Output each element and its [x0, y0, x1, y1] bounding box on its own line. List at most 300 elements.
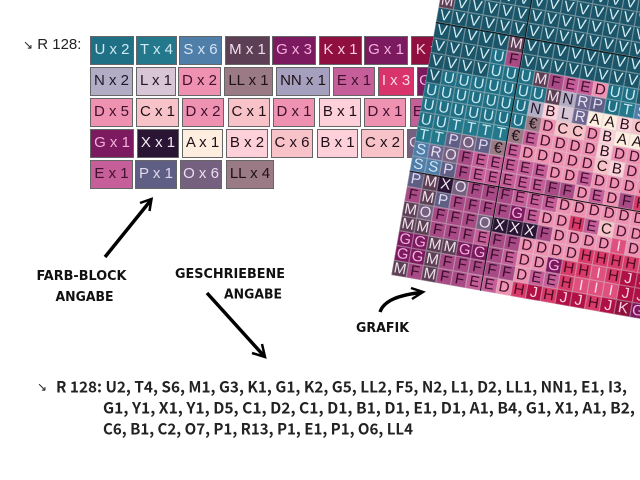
chart: rotated letter grid: C — [555, 120, 569, 139]
chart: rotated letter grid: F — [461, 226, 473, 244]
chart: rotated letter grid: B — [544, 103, 556, 121]
chart: rotated letter grid: S — [414, 141, 427, 159]
chart: rotated letter grid: D — [612, 145, 626, 164]
chart: rotated letter grid: U — [442, 69, 455, 88]
chart: rotated letter grid: G — [410, 248, 424, 266]
chart: rotated letter grid: U — [434, 114, 447, 132]
chart: rotated letter grid: D — [617, 207, 630, 226]
chart: rotated letter grid: M — [533, 70, 548, 89]
chart: rotated letter grid: V — [619, 24, 632, 42]
chart: rotated letter grid: D — [553, 135, 566, 153]
chart: rotated letter grid: V — [515, 5, 527, 24]
colour block row 1 — [90, 36, 455, 65]
chart: rotated letter grid: V — [577, 1, 590, 20]
chart: rotated letter grid: E — [503, 157, 516, 175]
colour block row 4: X x 1 — [141, 134, 175, 151]
chart: rotated letter grid: V — [453, 10, 465, 28]
chart: rotated letter grid: D — [549, 241, 563, 260]
chart: rotated letter grid: V — [495, 33, 507, 51]
chart: rotated letter grid: E — [579, 78, 591, 97]
chart: rotated letter grid: H — [512, 281, 525, 299]
label: geschriebene Angabe — [175, 266, 285, 302]
chart: rotated letter grid: F — [481, 199, 493, 217]
chart: rotated letter grid: V — [427, 67, 440, 85]
chart: rotated letter grid: O — [443, 146, 458, 165]
chart: rotated letter grid: F — [546, 180, 558, 198]
chart: rotated letter grid: U — [496, 109, 510, 128]
chart: rotated letter grid: C — [595, 158, 608, 176]
chart: rotated letter grid: E — [590, 187, 603, 206]
label: Farb-Block Angabe — [36, 268, 127, 305]
chart: rotated letter grid: G — [472, 243, 486, 262]
colour block row 5: LL x 4 — [230, 165, 270, 182]
chart: rotated letter grid: D — [624, 163, 638, 181]
colour block row 2: I x 3 — [382, 72, 410, 89]
chart: rotated letter grid: V — [604, 21, 617, 40]
chart: rotated letter grid: V — [542, 26, 555, 44]
chart: rotated letter grid: V — [482, 15, 495, 34]
arrow: to graphic — [380, 288, 423, 312]
chart: rotated letter grid: U — [511, 112, 524, 131]
colour block row 4: C x 6 — [274, 134, 310, 151]
chart: rotated letter grid: F — [471, 258, 483, 277]
chart: rotated letter grid: D — [572, 199, 586, 218]
chart: rotated letter grid: I — [615, 238, 622, 255]
chart: rotated letter grid: H — [579, 247, 593, 265]
chart: rotated letter grid: J — [558, 289, 568, 307]
chart: rotated letter grid: F — [438, 268, 450, 286]
chart: rotated letter grid: T — [621, 101, 633, 119]
chart: rotated letter grid: U — [492, 47, 505, 66]
chart: rotated letter grid: M — [392, 260, 407, 279]
chart: rotated letter grid: V — [497, 18, 510, 36]
chart: rotated letter grid: D — [520, 144, 534, 163]
chart: rotated letter grid: D — [552, 227, 566, 245]
chart: rotated letter grid: F — [549, 73, 561, 91]
chart: rotated letter grid: O — [477, 213, 492, 232]
chart: rotated letter grid: F — [464, 211, 476, 229]
chart: rotated letter grid: U — [499, 95, 512, 113]
chart: rotated letter grid: D — [548, 165, 561, 183]
chart: rotated letter grid: V — [606, 6, 619, 25]
colour block row 3: C x 1 — [140, 103, 175, 120]
colour block row 1: M x 1 — [229, 41, 266, 58]
chart: rotated letter grid: E — [578, 170, 590, 188]
chart: rotated letter grid: H — [606, 267, 620, 285]
chart: rotated letter grid: F — [561, 182, 573, 200]
chart: rotated letter grid: I — [592, 280, 599, 297]
chart: rotated letter grid: E — [506, 142, 519, 160]
colour block row 2: L x 1 — [140, 72, 172, 89]
chart: rotated letter grid: M — [545, 87, 560, 106]
written instructions: G1, Y1, X1, Y1, D5, C1, D2, C1, D1, B1, D1, E1, D1, A1, B4, G1, X1, A1, B2, — [103, 396, 635, 418]
chart: rotated letter grid: F — [499, 187, 510, 205]
chart: rotated letter grid: F — [506, 234, 517, 252]
chart: rotated letter grid: X — [439, 176, 451, 194]
chart: rotated letter grid: U — [519, 67, 532, 86]
chart: rotated letter grid: F — [459, 149, 471, 167]
chart: rotated letter grid: D — [582, 232, 595, 250]
chart: rotated letter grid: H — [586, 294, 600, 313]
chart: rotated letter grid: V — [569, 46, 582, 64]
chart: rotated letter grid: V — [572, 31, 584, 49]
colour block row 3: D x 1 — [367, 103, 402, 120]
chart: rotated letter grid: V — [613, 54, 626, 72]
chart: rotated letter grid: D — [532, 254, 545, 272]
chart: rotated letter grid: V — [599, 51, 611, 69]
colour block row 4: B x 2 — [230, 134, 264, 151]
chart: rotated letter grid: T — [417, 126, 429, 145]
chart: rotated letter grid: V — [430, 52, 443, 70]
chart: rotated letter grid: U — [457, 72, 470, 90]
chart: rotated letter grid: U — [481, 107, 495, 125]
chart: rotated letter grid: N — [528, 100, 542, 118]
chart: rotated letter grid: E — [543, 194, 555, 213]
chart: rotated letter grid: U — [484, 92, 497, 111]
chart: rotated letter grid: D — [568, 137, 581, 156]
chart: rotated letter grid: U — [419, 111, 433, 130]
chart: rotated letter grid: V — [485, 0, 498, 19]
colour block row 3: C x 1 — [231, 103, 266, 120]
chart: rotated letter grid: V — [512, 20, 525, 39]
chart: rotated letter grid: M — [423, 173, 438, 192]
chart: rotated letter grid: V — [447, 40, 460, 58]
chart: rotated letter grid: U — [451, 102, 465, 120]
colour block row 3: D x 5 — [94, 103, 129, 120]
colour block row 4: O x 7 — [409, 134, 445, 151]
chart: rotated letter grid: D — [626, 240, 640, 258]
colour block row 5: O x 6 — [183, 165, 219, 182]
chart: rotated letter grid: D — [564, 244, 578, 263]
chart: rotated letter grid: U — [454, 87, 468, 105]
chart: rotated letter grid: M — [508, 35, 523, 54]
colour block row 4: A x 1 — [186, 134, 219, 151]
chart: rotated letter grid: D — [567, 229, 580, 248]
chart: rotated letter grid: E — [523, 130, 536, 148]
chart: rotated letter grid: J — [573, 292, 583, 310]
chart: rotated letter grid: V — [537, 55, 549, 74]
chart: rotated letter grid: V — [554, 43, 567, 62]
chart: rotated letter grid: D — [604, 190, 618, 208]
chart: rotated letter grid: I — [595, 265, 602, 282]
chart: rotated letter grid: F — [431, 221, 443, 239]
chart: rotated letter grid: V — [551, 58, 564, 76]
chart: rotated letter grid: D — [585, 125, 599, 144]
chart: rotated letter grid: U — [489, 62, 503, 81]
chart: rotated letter grid: V — [586, 33, 599, 52]
chart: rotated letter grid: X — [493, 216, 506, 235]
chart: rotated letter grid: J — [603, 297, 613, 315]
chart: rotated letter grid: U — [424, 81, 438, 100]
chart: rotated letter grid: M — [424, 250, 440, 269]
chart: rotated letter grid: D — [607, 175, 621, 194]
chart: rotated letter grid: F — [451, 194, 463, 212]
panel: colour block instructions — [90, 36, 457, 189]
chart: rotated letter grid: R — [429, 144, 442, 162]
chart: rotated letter grid: D — [602, 205, 615, 223]
chart: rotated letter grid: E — [564, 75, 576, 94]
chart: rotated letter grid: G — [398, 230, 412, 249]
chart: rotated letter grid: R — [575, 93, 589, 111]
chart: rotated letter grid: A — [588, 110, 601, 129]
chart: rotated letter grid: U — [469, 89, 482, 108]
colour block row 1: G x 1 — [368, 41, 404, 58]
chart: rotated letter grid: A — [615, 130, 628, 149]
chart: rotated letter grid: V — [592, 4, 604, 22]
chart: rotated letter grid: S — [412, 156, 424, 174]
chart: rotated letter grid: E — [474, 151, 486, 170]
written instructions — [37, 376, 635, 440]
colour block row 2: D x 2 — [182, 72, 217, 89]
chart: rotated letter grid: D — [565, 152, 579, 171]
chart: rotated letter grid: M — [442, 238, 457, 257]
colour block row 1: K x 2 — [416, 41, 450, 58]
chart: rotated letter grid: X — [508, 219, 521, 237]
chart: rotated letter grid: H — [576, 262, 590, 280]
colour block row 3: D x 2 — [185, 103, 220, 120]
chart: rotated letter grid: T — [494, 124, 506, 143]
colour block row 1: U x 2 — [94, 41, 130, 58]
chart: rotated letter grid: F — [449, 208, 461, 227]
chart: rotated letter grid: V — [544, 11, 557, 29]
chart: rotated letter grid: D — [557, 197, 571, 215]
chart: rotated letter grid: D — [580, 155, 594, 174]
chart: rotated letter grid: U — [516, 82, 530, 101]
chart: rotated letter grid: V — [462, 42, 475, 61]
colour block row 2: NN x 1 — [280, 72, 326, 89]
chart: rotated letter grid: U — [513, 97, 527, 116]
chart: rotated letter grid: E — [533, 162, 546, 180]
chart: rotated letter grid: D — [575, 185, 588, 203]
chart: rotated letter grid: B — [610, 160, 623, 179]
chart: rotated letter grid: E — [482, 276, 495, 294]
chart: rotated letter grid: M — [402, 200, 418, 219]
chart: rotated letter grid: P — [591, 96, 604, 114]
chart: rotated letter grid: U — [466, 104, 480, 123]
colour block row 1: K x 1 — [323, 41, 358, 58]
chart: rotated letter grid: V — [438, 7, 451, 26]
chart: rotated letter grid: M — [415, 218, 430, 237]
chart: rotated letter grid: € — [492, 139, 503, 158]
chart: rotated letter grid: F — [469, 181, 481, 200]
written instructions: ↘ — [37, 380, 47, 394]
chart: rotated letter grid: V — [566, 61, 579, 79]
chart: rotated letter grid: V — [616, 39, 629, 57]
written instructions: R 128: U2, T4, S6, M1, G3, K1, G1, K2, G5, LL2, F5, N2, L1, D2, LL1, NN1, E1, I3, — [56, 376, 627, 398]
chart: rotated letter grid: V — [465, 27, 478, 46]
chart: rotated letter grid: F — [507, 50, 519, 68]
chart: rotated letter grid: B — [618, 116, 631, 134]
chart: rotated letter grid: D — [596, 234, 610, 253]
chart: rotated letter grid: F — [485, 261, 497, 279]
chart: rotated letter grid: V — [584, 48, 597, 67]
chart: rotated letter grid: D — [535, 147, 549, 166]
chart: rotated letter grid: U — [422, 96, 435, 115]
chart: rotated letter grid: O — [461, 134, 475, 153]
chart: rotated letter grid: N — [561, 90, 574, 109]
chart: rotated letter grid: P — [476, 137, 489, 155]
chart: rotated letter grid: J — [528, 284, 539, 302]
label: Farb-Block Angabe: FARB-BLOCK — [36, 268, 127, 284]
chart: rotated letter grid: D — [514, 266, 528, 285]
chart: rotated letter grid: D — [540, 209, 553, 228]
chart: rotated letter grid: V — [557, 28, 569, 47]
chart: rotated letter grid: I — [577, 277, 584, 294]
chart: rotated letter grid: B — [598, 143, 611, 161]
chart: rotated letter grid: € — [509, 127, 521, 145]
chart: rotated letter grid: H — [541, 286, 555, 305]
chart: rotated letter grid: F — [407, 186, 419, 204]
chart: rotated letter grid: G — [546, 256, 561, 275]
chart: rotated letter grid: V — [621, 9, 634, 27]
chart: rotated letter grid: V — [589, 19, 602, 37]
chart: rotated letter grid: V — [524, 38, 537, 56]
label: Grafik: GRAFIK — [356, 320, 409, 336]
chart: rotated letter grid: U — [436, 99, 450, 118]
chart: rotated letter grid: D — [550, 150, 564, 168]
chart: rotated letter grid: F — [488, 246, 500, 264]
chart: rotated letter grid: B — [600, 128, 613, 146]
chart: rotated letter grid: E — [488, 154, 501, 173]
chart: rotated letter grid: V — [574, 16, 587, 34]
chart: rotated letter grid: V — [581, 63, 594, 82]
colour block row 5: P x 1 — [139, 165, 173, 182]
chart: rotated letter grid: E — [518, 159, 531, 178]
chart: rotated letter grid: H — [609, 252, 622, 271]
chart: rotated letter grid: F — [538, 224, 550, 242]
chart: rotated letter grid: F — [408, 263, 420, 281]
chart: rotated letter grid: P — [441, 161, 454, 180]
colour block row 1: T x 4 — [140, 41, 173, 58]
chart: rotated letter grid: D — [592, 172, 606, 191]
chart: rotated letter grid: G — [412, 233, 427, 251]
arrow: to written instructions — [207, 293, 265, 357]
chart: rotated letter grid: U — [623, 86, 636, 104]
colour block row 5: E x 1 — [94, 165, 129, 182]
chart: rotated letter grid: T — [464, 119, 476, 138]
chart: rotated letter grid: V — [559, 13, 572, 32]
chart: rotated letter grid: E — [501, 172, 514, 190]
chart: rotated letter grid: T — [432, 129, 444, 147]
colour block row 2: E x 1 — [337, 72, 371, 89]
chart: rotated letter grid: E — [471, 166, 484, 185]
chart: rotated letter grid: V — [611, 68, 624, 87]
chart: rotated letter grid: V — [432, 37, 445, 55]
chart: rotated letter grid: V — [527, 23, 540, 41]
chart: rotated letter grid: J — [620, 285, 630, 303]
colour block row 5 — [90, 160, 274, 189]
chart: rotated letter grid: U — [608, 83, 621, 102]
chart: rotated letter grid: T — [450, 117, 462, 135]
chart: rotated letter grid: S — [426, 158, 439, 177]
chart: rotated letter grid: D — [555, 212, 568, 230]
chart: rotated letter grid: E — [528, 192, 541, 210]
chart: rotated letter grid: U — [504, 65, 517, 83]
chart: rotated letter grid: V — [445, 54, 458, 73]
chart: rotated letter grid: H — [624, 255, 637, 273]
chart: rotated letter grid: U — [605, 98, 619, 117]
chart: rotated letter grid: M — [400, 215, 415, 234]
chart: rotated letter grid: F — [491, 231, 503, 249]
chart: rotated letter grid: E — [544, 271, 557, 290]
colour block row 2 — [90, 67, 457, 96]
chart: rotated letter grid: M — [420, 188, 435, 207]
chart: rotated letter grid: E — [516, 174, 528, 193]
chart: rotated letter grid: E — [502, 249, 515, 267]
colour block row 2: LL x 1 — [228, 72, 269, 89]
chart: rotated letter grid: T — [479, 122, 491, 140]
chart: rotated letter grid: F — [466, 196, 478, 214]
chart: rotated letter grid: F — [441, 253, 453, 271]
chart: rotated letter grid: U — [531, 85, 545, 104]
chart: rotated letter grid: V — [601, 36, 614, 55]
chart: rotated letter grid: D — [497, 278, 510, 297]
chart: rotated letter grid: H — [594, 249, 608, 268]
chart: rotated letter grid: U — [471, 74, 485, 93]
chart: rotated letter grid: V — [435, 22, 448, 41]
chart: rotated letter grid: H — [569, 214, 583, 233]
chart: rotated letter grid: I — [607, 282, 614, 300]
chart: rotated letter grid: E — [513, 189, 526, 208]
chart: rotated letter grid: E — [530, 269, 542, 287]
chart: rotated letter grid: X — [523, 221, 535, 240]
chart: rotated letter grid: G — [457, 241, 472, 259]
chart: rotated letter grid: D — [587, 202, 601, 221]
arrow: to colour blocks — [105, 199, 152, 257]
chart: rotated letter grid: R — [573, 108, 587, 126]
chart: rotated letter grid: C — [599, 220, 613, 238]
chart: rotated letter grid: F — [434, 206, 446, 224]
chart: rotated letter grid: V — [477, 45, 490, 63]
colour block row 1: G x 3 — [276, 41, 312, 58]
chart: rotated letter grid: K — [616, 299, 629, 318]
chart: rotated letter grid: D — [562, 167, 576, 186]
chart: rotated letter grid: E — [585, 217, 597, 236]
colour block row 3: B x 1 — [323, 103, 357, 120]
chart: rotated letter grid: D — [582, 140, 596, 159]
colour block row 4: G x 1 — [94, 134, 130, 151]
chart: rotated letter grid: V — [467, 12, 480, 31]
colour block row 4: C x 2 — [365, 134, 400, 151]
colour block row 3: D x 1 — [276, 103, 312, 120]
row label: R 128: ↘ R 128: — [23, 36, 81, 53]
chart: rotated letter grid: D — [517, 251, 531, 270]
chart: rotated letter grid: M — [427, 235, 442, 254]
chart: rotated letter grid: U — [486, 77, 500, 96]
chart: rotated letter grid: P — [436, 191, 449, 209]
chart: rotated letter grid: G — [510, 204, 524, 223]
chart: rotated letter grid: O — [453, 178, 467, 197]
label: Farb-Block Angabe: ANGABE — [56, 289, 114, 305]
chart: rotated letter grid: G — [395, 245, 409, 264]
chart: rotated letter grid: D — [541, 117, 554, 136]
chart: rotated letter grid: V — [626, 71, 639, 90]
chart: rotated letter grid: C — [570, 123, 584, 141]
chart: rotated letter grid: D — [614, 222, 628, 241]
label: geschriebene Angabe: GESCHRIEBENE — [175, 266, 285, 282]
chart: rotated letter grid: D — [593, 81, 607, 99]
chart: rotated letter grid: V — [480, 30, 493, 48]
chart: rotated letter grid: V — [474, 60, 487, 78]
chart: rotated letter grid: V — [460, 57, 472, 76]
chart: rotated letter grid: A — [603, 113, 616, 131]
chart: rotated letter grid: F — [496, 201, 508, 220]
chart: rotated letter grid: H — [562, 259, 575, 278]
chart: rotated letter grid: F — [446, 223, 458, 242]
chart: rotated letter grid: E — [486, 169, 499, 187]
chart: rotated letter grid: V — [500, 3, 513, 21]
colour block row 1: S x 6 — [183, 41, 218, 58]
